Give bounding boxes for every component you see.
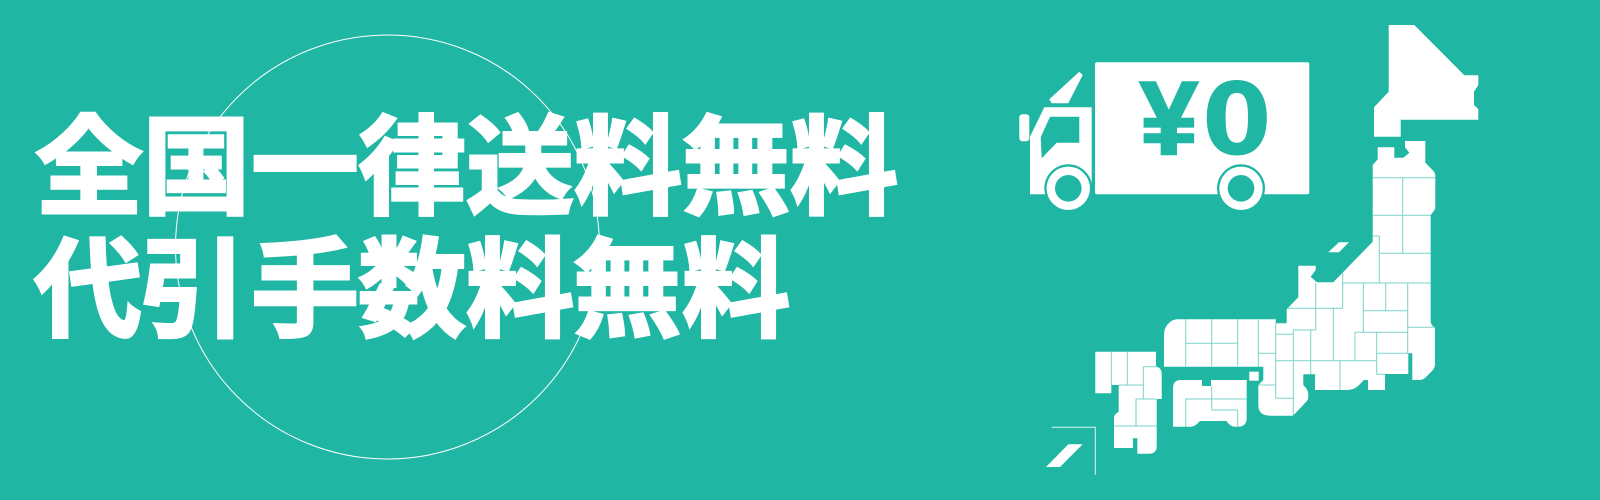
decorative circle xyxy=(176,35,600,459)
zero yen label: ¥ xyxy=(1140,61,1198,177)
icon: truck with zero yen xyxy=(1019,61,1309,212)
Honshu xyxy=(1164,141,1435,416)
heading line 1: 全国一律送料無料 xyxy=(35,108,898,228)
Kyushu xyxy=(1095,352,1162,454)
front wheel xyxy=(1044,164,1092,212)
truck visor xyxy=(1049,72,1083,103)
truck cargo box xyxy=(1095,62,1309,194)
Sado island xyxy=(1328,242,1349,252)
prefecture borders xyxy=(1111,178,1435,427)
heading xyxy=(34,108,898,351)
map of Japan xyxy=(1095,25,1478,454)
icon: corner arrow mark xyxy=(1046,427,1095,475)
rear wheel xyxy=(1217,164,1265,212)
Awaji island xyxy=(1249,372,1259,381)
arrow corner lines xyxy=(1052,427,1095,475)
truck mirror xyxy=(1019,114,1029,141)
Hokkaido xyxy=(1374,25,1478,137)
arrow slash xyxy=(1046,444,1083,467)
truck cab xyxy=(1030,107,1092,194)
zero yen label: 0 xyxy=(1202,61,1272,178)
Shikoku xyxy=(1173,380,1247,427)
heading line 2: 代引手数料無料 xyxy=(34,230,790,351)
